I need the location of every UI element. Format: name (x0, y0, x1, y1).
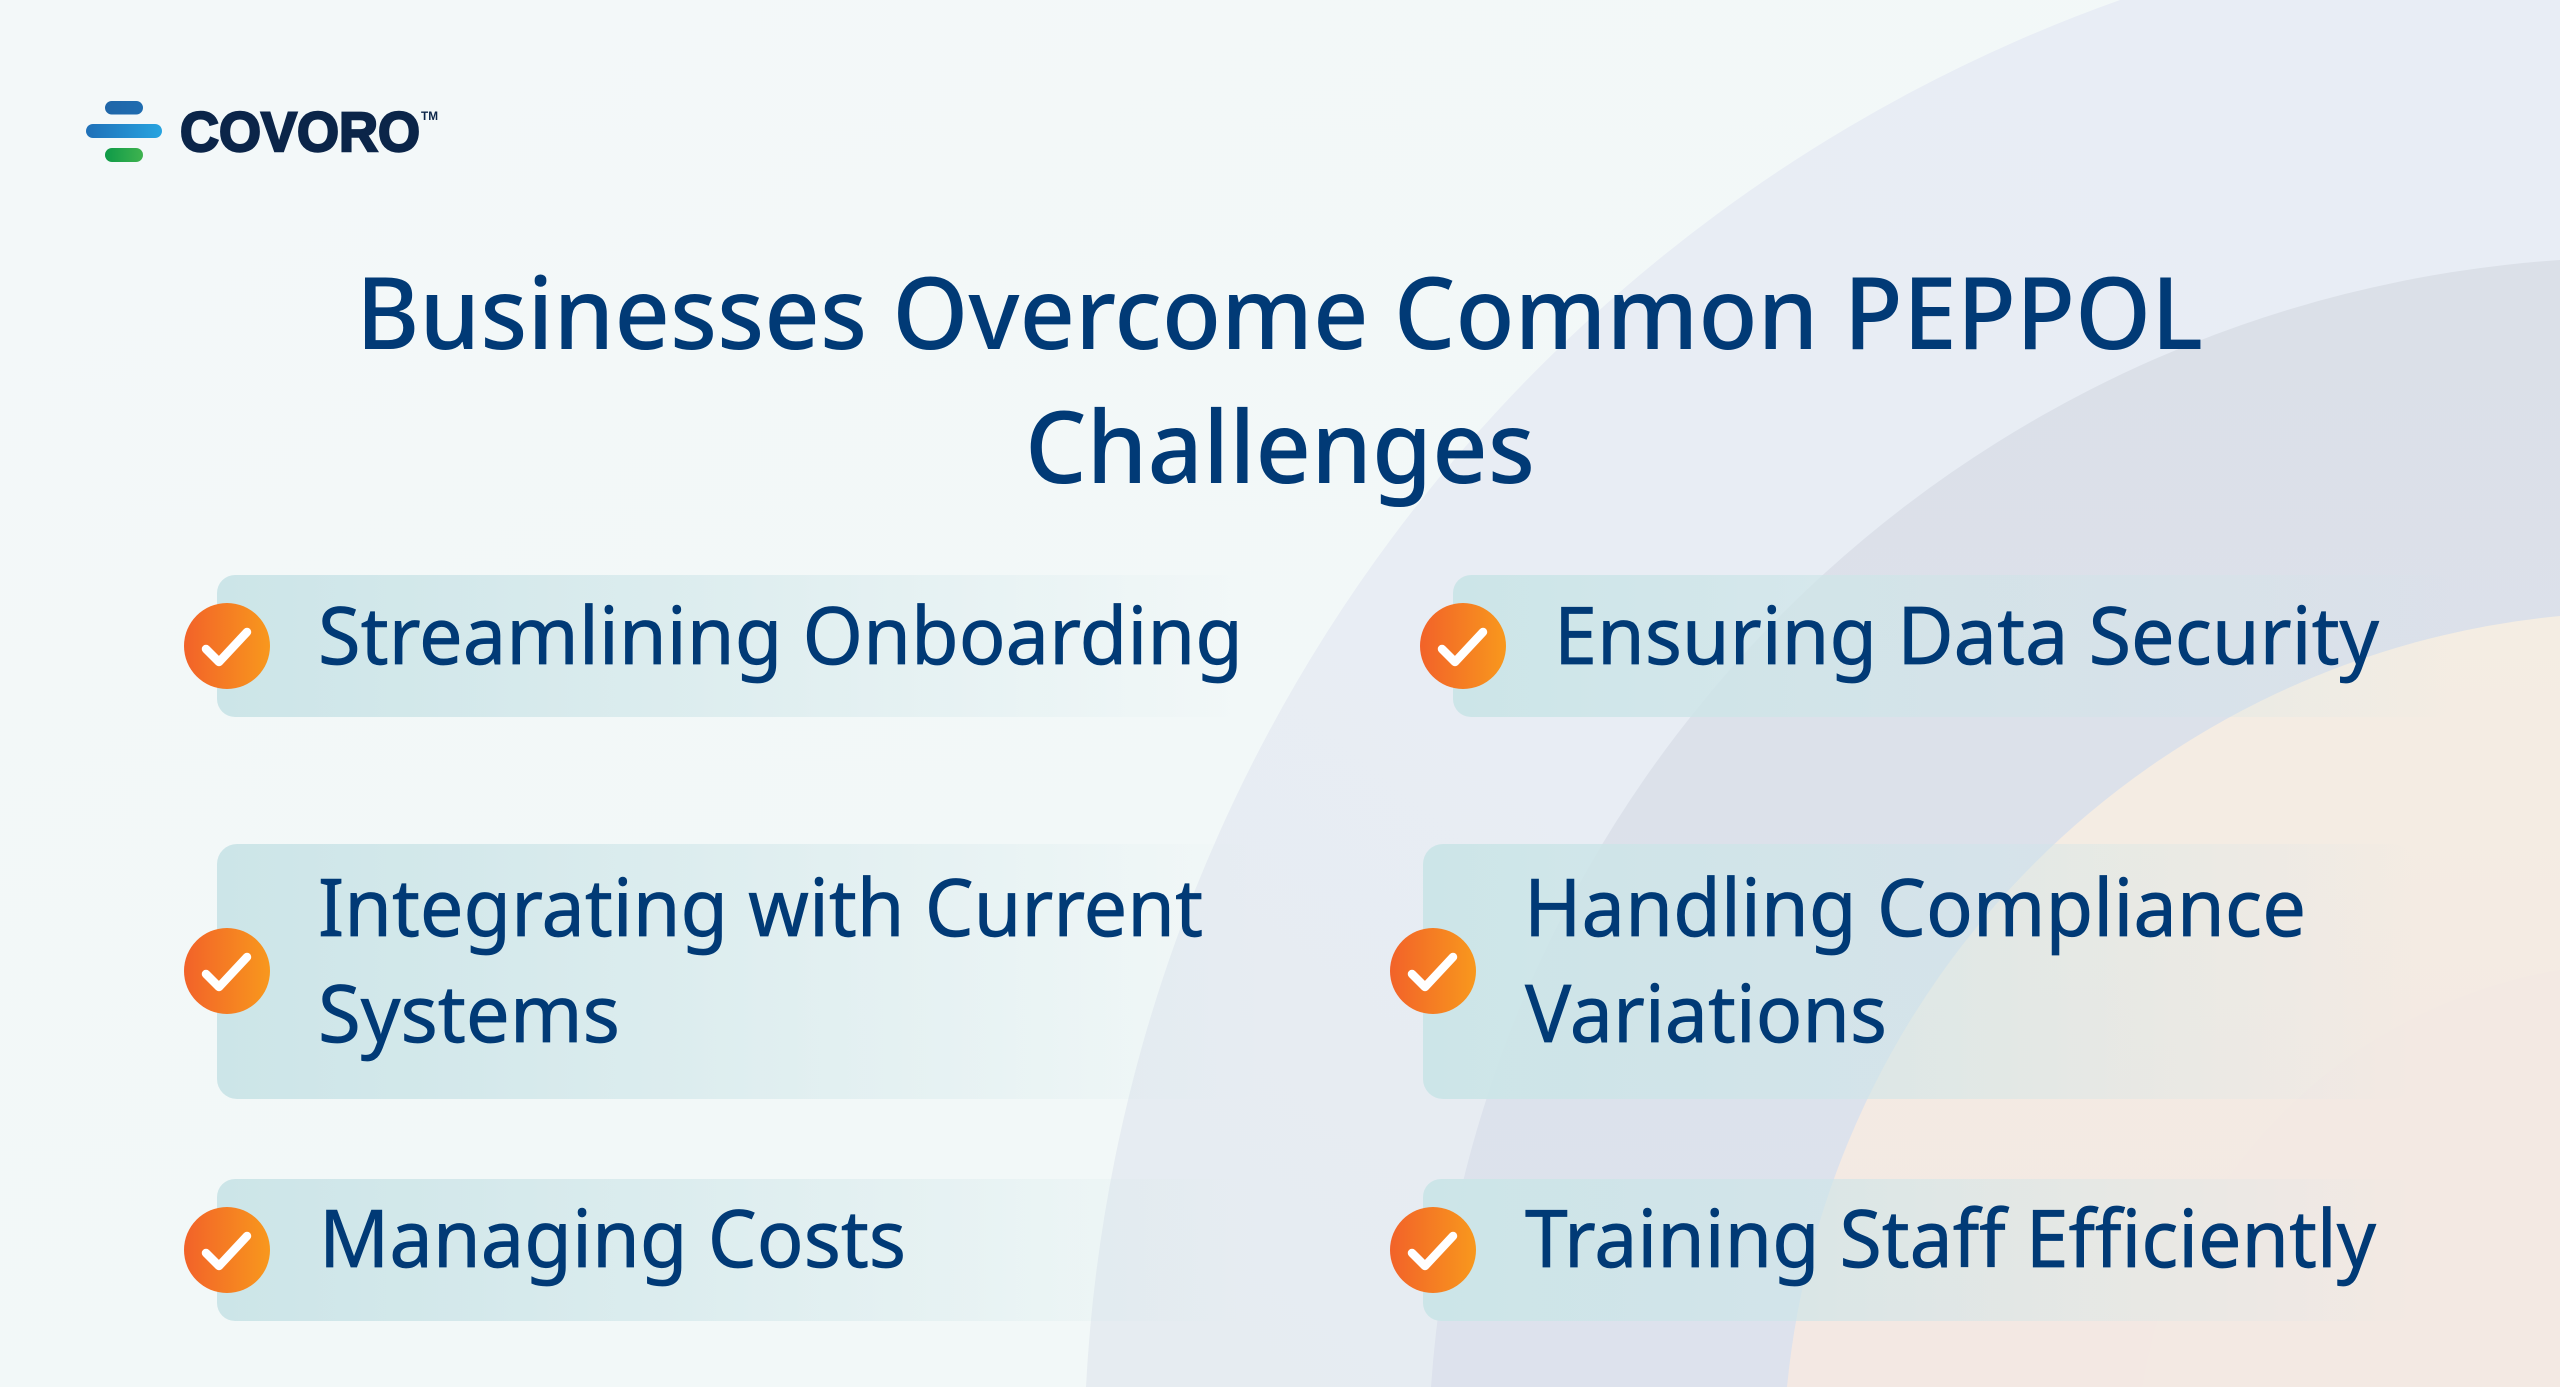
item: Managing Costs: Managing Costs (319, 1182, 906, 1291)
background arc: second (1431, 260, 2560, 1387)
item: Ensuring Data Security: Ensuring Data Security (1554, 579, 2379, 688)
item: Integrating with Current Systems: Systems (318, 957, 620, 1066)
item: Training Staff Efficiently (1390, 1179, 2413, 1321)
item: Streamlining Onboarding (184, 575, 1257, 717)
item: Managing Costs (184, 1179, 1257, 1321)
background arc: third (1787, 616, 2560, 1387)
item: Training Staff Efficiently: Training Staff Efficiently (1525, 1182, 2376, 1291)
item: Streamlining Onboarding: Streamlining Onboarding (318, 579, 1243, 688)
logo: TM (421, 109, 438, 123)
background arc: inner (2142, 970, 2560, 1387)
title: Businesses Overcome Common PEPPOL (356, 243, 2203, 379)
item: Ensuring Data Security (1420, 575, 2453, 717)
item: Handling Compliance Variations: Handling Compliance (1524, 851, 2306, 960)
title (356, 243, 2203, 513)
background arc: outer (1086, 0, 2560, 1387)
item: Handling Compliance Variations (1390, 844, 2413, 1099)
item: Handling Compliance Variations: Variations (1525, 957, 1887, 1066)
logo: COVORO (180, 100, 420, 163)
item: Integrating with Current Systems: Integrating with Current (318, 851, 1203, 960)
title: Challenges (1025, 377, 1535, 513)
item: Integrating with Current Systems (184, 844, 1257, 1099)
